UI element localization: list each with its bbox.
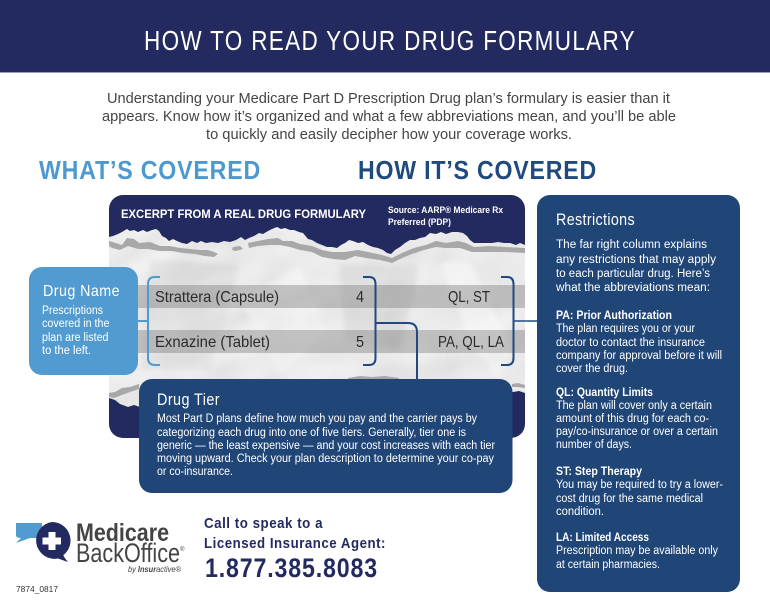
icon: speech bubbles with cross (16, 522, 71, 562)
panel: restrictions: to each particular drug. Here’s (556, 268, 710, 280)
prior authorization: cover the drug. (556, 363, 628, 375)
call to action (204, 515, 386, 583)
limited access (556, 532, 718, 571)
panel: drug name: to the left. (42, 345, 91, 357)
quantity limits (556, 387, 718, 451)
step therapy: ST: Step Therapy (556, 466, 643, 478)
prior authorization: company for approval before it will (556, 350, 722, 362)
panel: restrictions: what the abbreviations mean: (555, 282, 710, 294)
call to action: Call to speak to a (204, 515, 323, 532)
intro text: Understanding your Medicare Part D Prescription Drug plan’s formulary is easier than it (107, 90, 671, 107)
table rows (137, 285, 525, 353)
row: Exnazine (155, 334, 504, 351)
logo: Medicare BackOffice: Medicare (76, 519, 169, 547)
row: Exnazine: PA, QL, LA (438, 334, 504, 351)
panel: drug tier: or co-insurance. (157, 466, 233, 478)
prior authorization: PA: Prior Authorization (556, 310, 672, 322)
step therapy (556, 466, 723, 518)
step therapy: condition. (556, 506, 604, 518)
panel: drug name: plan are listed (42, 332, 108, 344)
call to action: Licensed Insurance Agent: (204, 535, 386, 552)
step therapy: cost drug for the same medical (556, 493, 703, 505)
panel: drug tier (139, 379, 512, 493)
panel: drug tier: Most Part D plans define how much you pay and the carrier pays by (157, 413, 477, 425)
panel: drug tier: generic — the least expensive — and your cost increases with each tier (157, 440, 495, 452)
logo: Medicare BackOffice: ® (180, 546, 185, 553)
panel: restrictions (537, 195, 740, 592)
prior authorization: doctor to contact the insurance (556, 337, 705, 349)
row: Strattera: QL, ST (448, 289, 490, 306)
connector: restrictions (514, 320, 538, 322)
connector: drug tier (376, 323, 417, 380)
panel: restrictions: Restrictions (556, 211, 635, 229)
logo: Medicare BackOffice: by Insuractive® (128, 565, 181, 574)
source note: Source: AARP® Medicare Rx (388, 205, 504, 216)
heading: what's covered: WHAT’S COVERED (39, 155, 261, 185)
limited access: Prescription may be available only (556, 545, 718, 557)
quantity limits: pay/co-insurance or over a certain (556, 426, 718, 438)
row: Strattera: Strattera (Capsule) (155, 289, 279, 306)
row: Strattera (155, 289, 490, 306)
excerpt heading: EXCERPT FROM A REAL DRUG FORMULARY (121, 207, 366, 221)
logo: Medicare BackOffice (16, 519, 185, 574)
panel: drug tier: categorizing each drug into one of five tiers. Generally, tier one is (157, 427, 466, 439)
quantity limits: The plan will cover only a certain (556, 400, 712, 412)
intro text: to quickly and easily decipher how your coverage works. (206, 126, 572, 143)
bracket: drug name (137, 277, 160, 365)
job code: 7874_0817 (16, 585, 59, 594)
quantity limits: amount of this drug for each co- (556, 413, 709, 425)
panel: restrictions: any restrictions that may apply (556, 254, 716, 266)
limited access: at certain pharmacies. (556, 559, 660, 571)
prior authorization: The plan requires you or your (556, 323, 695, 335)
panel: restrictions: The far right column explains (556, 239, 707, 251)
quantity limits: number of days. (556, 439, 632, 451)
panel: drug name: covered in the (42, 318, 110, 330)
row: Exnazine: Exnazine (Tablet) (155, 334, 270, 351)
title: HOW TO READ YOUR DRUG FORMULARY (144, 25, 636, 56)
logo: Medicare BackOffice: BackOffice (76, 538, 180, 568)
panel: drug name (29, 267, 138, 375)
bracket: restrictions (501, 277, 514, 365)
row: Exnazine: 5 (356, 334, 364, 351)
bracket: drug tier (363, 277, 376, 365)
header banner (0, 0, 770, 73)
panel: drug name: Prescriptions (42, 305, 103, 317)
limited access: LA: Limited Access (556, 532, 649, 544)
quantity limits: QL: Quantity Limits (556, 387, 653, 399)
torn paper (109, 227, 525, 410)
panel: drug tier: moving upward. Check your plan description to determine your co-pay (157, 453, 494, 465)
panel: drug name: Drug Name (43, 283, 120, 300)
intro text (102, 90, 676, 143)
panel: drug tier: Drug Tier (157, 390, 220, 409)
row: Strattera: 4 (356, 289, 364, 306)
panel: formulary excerpt (109, 195, 525, 438)
phone number: 1.877.385.8083 (205, 553, 378, 583)
source note: Preferred (PDP) (388, 217, 451, 228)
heading: how it's covered: HOW IT’S COVERED (358, 155, 597, 185)
prior authorization (556, 310, 722, 375)
source note (388, 205, 504, 228)
intro text: appears. Know how it’s organized and what a few abbreviations mean, and you’ll be able (102, 108, 676, 125)
step therapy: You may be required to try a lower- (556, 479, 723, 491)
